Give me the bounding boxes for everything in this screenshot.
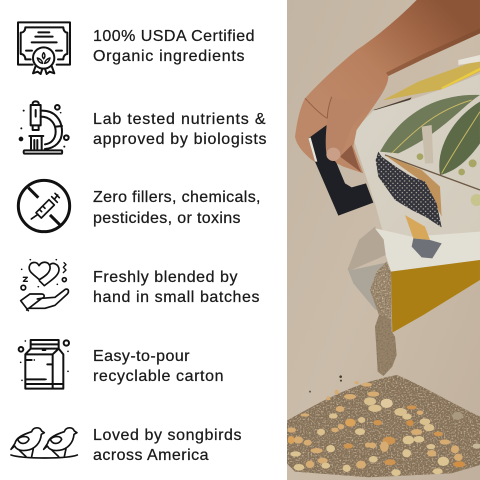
text: hand blended: hand in small batches: [93, 289, 260, 306]
text: carton: Easy-to-pour: [93, 348, 190, 365]
hand base: [295, 0, 480, 173]
knuckle crease: [305, 97, 332, 118]
icon: carton: [19, 340, 69, 389]
text: songbirds: across America: [93, 447, 209, 464]
carton handle: [308, 125, 373, 216]
text: USDA organic: 100% USDA Certified: [93, 28, 255, 45]
feature 5: carton: [19, 340, 224, 389]
carton yellow underside: [391, 260, 480, 333]
carton inner wall: [348, 263, 392, 315]
carton lower face: [375, 228, 480, 272]
index finger: [326, 88, 385, 161]
feature 1: USDA organic: [18, 22, 255, 74]
bird tail: [405, 215, 430, 240]
bird body: [376, 152, 442, 227]
carton top: [352, 55, 480, 240]
handle white edge: [308, 137, 317, 162]
leaf illustrations: [380, 95, 480, 153]
forearm underside shadow: [386, 28, 480, 76]
photo left edge: [285, 0, 287, 480]
icon: certificate: [18, 22, 70, 74]
pouring seed stream: [370, 262, 397, 376]
text: lab tested: approved by biologists: [93, 131, 267, 148]
feature 6: songbirds: [11, 427, 242, 464]
lower finger: [340, 145, 362, 173]
bird illustration: [376, 152, 442, 258]
seed pile: [285, 375, 480, 477]
feature 3: zero fillers: [18, 180, 261, 232]
icon: microscope: [19, 101, 69, 154]
carton bottom and opening: [285, 227, 480, 477]
feature 4: hand blended: [21, 259, 260, 311]
photo backdrop: [287, 0, 480, 480]
photo: hand pouring seed from carton: [285, 0, 480, 480]
feature 2: lab tested: [19, 101, 267, 154]
text: USDA organic: Organic ingredients: [93, 48, 245, 65]
fingernail: [326, 148, 340, 161]
icon: two birds: [11, 428, 77, 458]
text: lab tested: Lab tested nutrients &: [93, 111, 266, 128]
carton inner flap: [347, 227, 386, 271]
hand and arm: [295, 0, 480, 216]
text: songbirds: Loved by songbirds: [93, 427, 242, 444]
bird breast: [385, 155, 442, 217]
text: zero fillers: Zero fillers, chemicals,: [93, 189, 261, 206]
text: zero fillers: pesticides, or toxins: [93, 210, 241, 227]
icon: hand with hearts: [21, 259, 68, 311]
carton yellow flap: [383, 59, 480, 100]
text: hand blended: Freshly blended by: [93, 269, 238, 286]
carton printed face: [352, 74, 480, 240]
text: carton: recyclable carton: [93, 368, 224, 385]
icon: no syringe: [18, 180, 70, 232]
